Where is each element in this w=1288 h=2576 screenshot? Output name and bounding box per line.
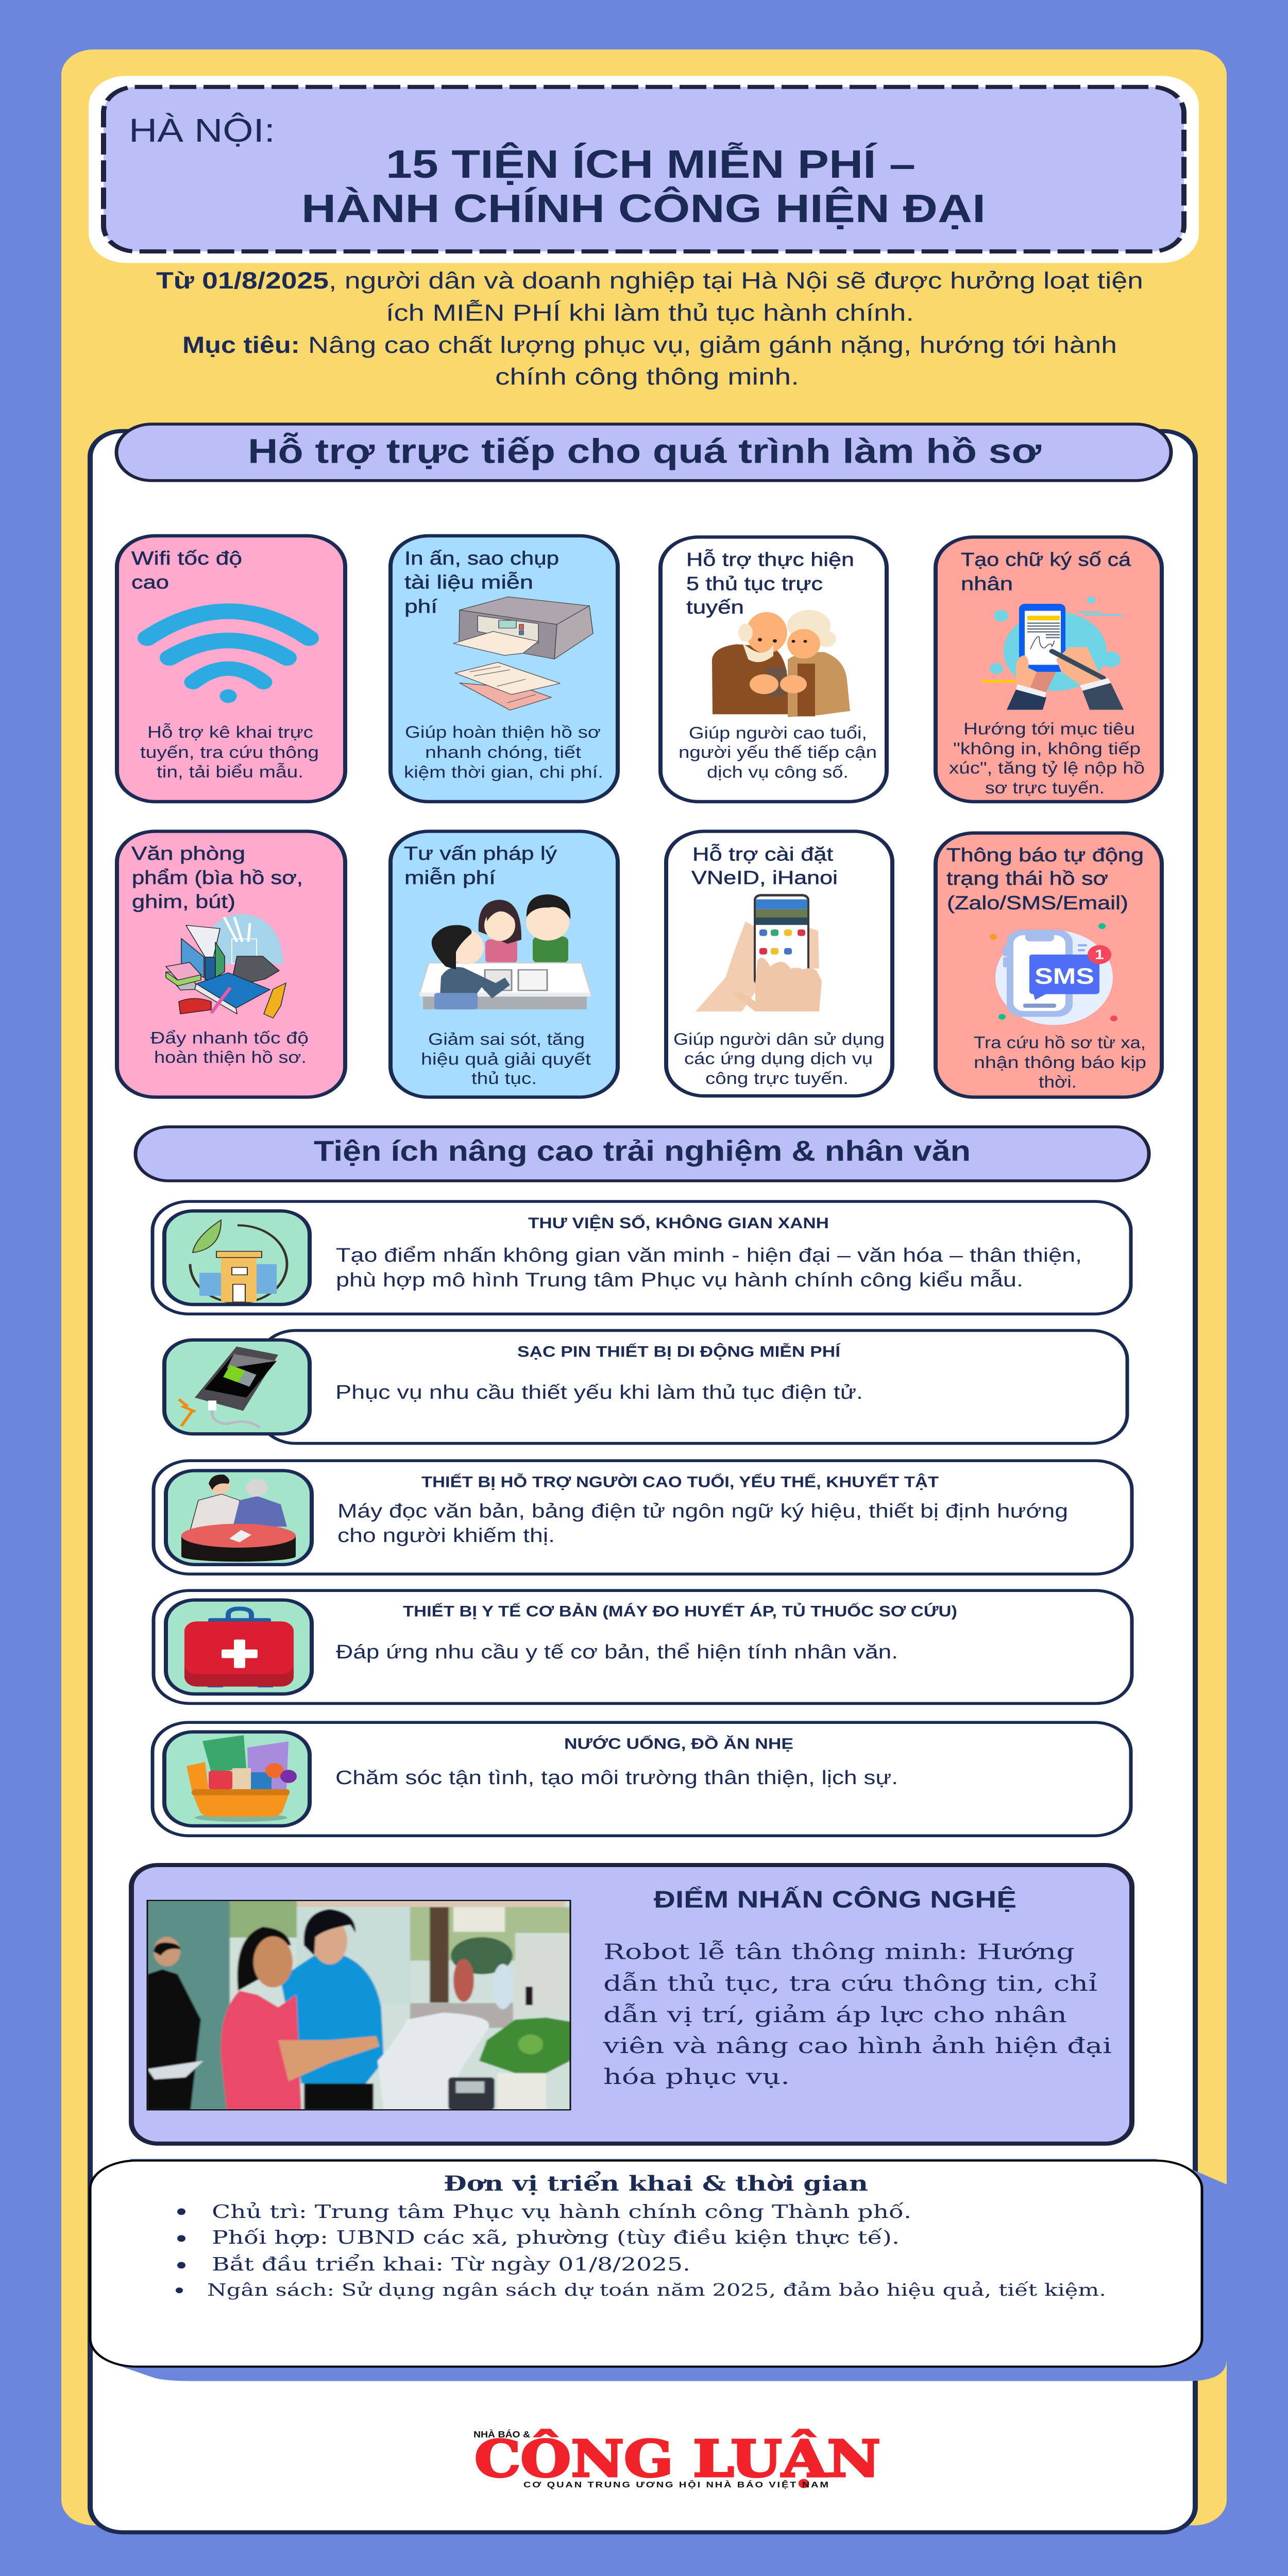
icon: SMS phone: 1	[1095, 948, 1104, 962]
title	[301, 142, 986, 231]
card background	[660, 537, 887, 802]
panel text: dẫn thủ tục, tra cứu thông tin, chỉ	[603, 1971, 1097, 1996]
card title: Văn phòng	[131, 842, 245, 864]
card description: thời.	[1039, 1073, 1077, 1091]
bullet list: Chủ trì: Trung tâm Phục vụ hành chính công Thành phố.	[212, 2201, 911, 2223]
kicker: Hà Nội: HÀ NỘI:	[129, 112, 275, 149]
intro text: Mục tiêu:	[182, 331, 300, 358]
logo: Công Luận: NHÀ BÁO &	[473, 2429, 530, 2440]
row heading: THIẾT BỊ HỖ TRỢ NGƯỜI CAO TUỔI, YẾU THẾ, KHUYẾT TẬT	[421, 1473, 939, 1490]
card title: Hỗ trợ cài đặt	[692, 843, 833, 865]
card title: In ấn, sao chụp	[404, 547, 559, 569]
row text: Chăm sóc tận tình, tạo môi trường thân thiện, lịch sự.	[335, 1767, 898, 1789]
card title: Wifi tốc độ	[131, 547, 242, 569]
card: digital signature	[936, 537, 1162, 802]
card description: nhận thông báo kịp	[974, 1053, 1146, 1072]
panel: implementation info	[90, 2159, 1227, 2381]
card title: Thông báo tự động	[946, 844, 1144, 866]
logo: Công Luận	[473, 2429, 880, 2489]
card description: công trực tuyến.	[705, 1069, 849, 1088]
card background	[936, 833, 1162, 1097]
row box	[152, 1722, 1131, 1836]
row text: Máy đọc văn bản, bảng điện tử ngôn ngữ ký hiệu, thiết bị định hướng	[337, 1500, 1068, 1522]
intro text: , người dân và doanh nghiệp tại Hà Nội sẽ được hưởng loạt tiện	[329, 267, 1143, 294]
card description	[679, 723, 877, 782]
panel blue extruded shadow	[114, 2159, 1227, 2381]
icon tile with charging phone	[164, 1340, 310, 1434]
row text: cho người khiếm thị.	[337, 1524, 555, 1547]
panel: technology highlight	[131, 1865, 1132, 2144]
card: VNeID install	[666, 832, 892, 1096]
icon: phone signature	[981, 597, 1124, 710]
icon: wifi	[147, 611, 309, 703]
card: printing	[391, 536, 618, 802]
card title: 5 thủ tục trực	[686, 573, 823, 595]
card description	[140, 723, 319, 781]
card title: Tạo chữ ký số cá	[961, 549, 1131, 570]
card title: VNeID, iHanoi	[691, 867, 838, 888]
logo: Công Luận: CƠ QUAN TRUNG ƯƠNG HỘI NHÀ BÁO VIỆT NAM	[523, 2480, 828, 2489]
row box	[152, 1201, 1131, 1314]
card title: (Zalo/SMS/Email)	[947, 892, 1128, 913]
row: phone charging	[164, 1330, 1127, 1444]
card description: Đẩy nhanh tốc độ	[150, 1028, 309, 1047]
card title: nhân	[961, 573, 1013, 595]
card background	[117, 832, 345, 1097]
card description: Giúp người dân sử dụng	[673, 1030, 885, 1048]
card description: người yếu thế tiếp cận	[679, 743, 877, 761]
logo: Công Luận: LUẬN	[693, 2429, 880, 2488]
panel text: dẫn vị trí, giảm áp lực cho nhân	[603, 2003, 1067, 2027]
row box	[154, 1461, 1132, 1574]
card description	[949, 719, 1145, 797]
header dashed box	[104, 87, 1184, 251]
panel text: hóa phục vụ.	[603, 2064, 790, 2089]
card description: tuyến, tra cứu thông	[140, 743, 319, 761]
card description: nhanh chóng, tiết	[425, 743, 581, 761]
panel text	[603, 1939, 1112, 2089]
card description	[421, 1030, 591, 1088]
icon tile with first aid kit	[166, 1600, 312, 1694]
card description	[974, 1033, 1146, 1091]
card: online procedures	[660, 537, 887, 802]
card description: Hướng tới mục tiêu	[963, 719, 1135, 738]
card: stationery	[117, 832, 345, 1097]
icon: SMS phone	[990, 923, 1117, 1025]
card background	[391, 536, 618, 802]
row heading: THIẾT BỊ Y TẾ CƠ BẢN (MÁY ĐO HUYẾT ÁP, TỦ THUỐC SƠ CỨU)	[403, 1602, 957, 1620]
icon: consultation	[419, 894, 591, 1009]
row text: phù hợp mô hình Trung tâm Phục vụ hành chính công kiểu mẫu.	[336, 1268, 1023, 1291]
card title: Tư vấn pháp lý	[404, 842, 557, 864]
card description: "không in, không tiếp	[953, 739, 1141, 758]
card background	[391, 832, 618, 1097]
card background	[117, 536, 345, 802]
card: legal advice	[391, 832, 618, 1097]
section heading: humane amenities	[135, 1127, 1149, 1181]
panel text: viên và nâng cao hình ảnh hiện đại	[603, 2033, 1112, 2058]
icon: printer and papers	[453, 597, 593, 710]
card description: Tra cứu hồ sơ từ xa,	[974, 1033, 1146, 1052]
intro text: Nâng cao chất lượng phục vụ, giảm gánh nặng, hướng tới hành	[308, 331, 1117, 358]
card description: Hỗ trợ kê khai trực	[147, 723, 313, 741]
intro text: ích MIỄN PHÍ khi làm thủ tục hành chính.	[386, 299, 914, 326]
logo: Công Luận: CÔNG	[474, 2429, 673, 2488]
card description	[673, 1030, 885, 1088]
row: drinks and snacks	[152, 1722, 1131, 1836]
row text: Tạo điểm nhấn không gian văn minh - hiện đại – văn hóa – thân thiện,	[336, 1244, 1082, 1266]
row text: Đáp ứng nhu cầu y tế cơ bản, thể hiện tính nhân văn.	[336, 1641, 898, 1663]
title: HÀNH CHÍNH CÔNG HIỆN ĐẠI	[301, 187, 986, 231]
row box	[260, 1330, 1127, 1444]
section heading: humane amenities: Tiện ích nâng cao trải nghiệm & nhân văn	[314, 1135, 971, 1167]
card description	[150, 1028, 309, 1066]
card title	[691, 843, 838, 888]
panel text: Robot lễ tân thông minh: Hướng	[603, 1939, 1075, 1964]
card title: tuyến	[686, 597, 744, 618]
card description	[404, 723, 603, 782]
card title: phí	[404, 596, 437, 617]
card description: tin, tải biểu mẫu.	[157, 762, 303, 781]
row text	[337, 1500, 1068, 1547]
card description: kiệm thời gian, chi phí.	[404, 762, 603, 782]
row heading: NƯỚC UỐNG, ĐỒ ĂN NHẸ	[564, 1735, 793, 1752]
card title: trạng thái hồ sơ	[946, 868, 1108, 889]
row text	[336, 1244, 1082, 1291]
bullet list: Bắt đầu triển khai: Từ ngày 01/8/2025.	[212, 2254, 690, 2275]
card description: Giúp hoàn thiện hồ sơ	[405, 723, 601, 741]
panel heading: Đơn vị triển khai & thời gian	[444, 2171, 868, 2196]
header white frame	[89, 76, 1199, 263]
card: SMS notification	[936, 833, 1162, 1097]
row heading: THƯ VIỆN SỐ, KHÔNG GIAN XANH	[528, 1214, 829, 1232]
card description: hiệu quả giải quyết	[421, 1049, 591, 1068]
icon: SMS phone: SMS	[1035, 964, 1094, 989]
icon: office supplies	[166, 914, 286, 1018]
intro text	[156, 267, 1143, 389]
bullet list	[176, 2201, 1106, 2300]
card description: xúc", tăng tỷ lệ nộp hồ	[949, 758, 1145, 777]
row heading: SẠC PIN THIẾT BỊ DI ĐỘNG MIỄN PHÍ	[517, 1343, 841, 1361]
panel background	[90, 2161, 1202, 2367]
main white panel	[90, 431, 1195, 2532]
section heading: direct support: Hỗ trợ trực tiếp cho quá trình làm hồ sơ	[248, 432, 1042, 470]
card description: hoàn thiện hồ sơ.	[154, 1048, 307, 1066]
card background	[936, 537, 1162, 802]
card description: thủ tục.	[471, 1069, 537, 1088]
card title	[946, 844, 1144, 913]
row box	[154, 1590, 1132, 1703]
card description: sơ trực tuyến.	[985, 778, 1105, 797]
photo: robot receptionist	[147, 1901, 570, 2110]
card description: Giảm sai sót, tăng	[428, 1030, 585, 1048]
title: 15 TIỆN ÍCH MIỄN PHÍ –	[386, 142, 916, 187]
card title: cao	[131, 571, 169, 592]
intro text: Từ 01/8/2025	[156, 267, 329, 294]
panel heading: ĐIỂM NHẤN CÔNG NGHỆ	[654, 1886, 1016, 1913]
card description: Giúp người cao tuổi,	[689, 723, 867, 742]
icon tile with people at table	[166, 1470, 312, 1565]
intro text: chính công thông minh.	[495, 363, 799, 389]
card title	[131, 842, 303, 912]
row text: Phục vụ nhu cầu thiết yếu khi làm thủ tục điện tử.	[335, 1382, 863, 1403]
card title: tài liệu miễn	[404, 571, 533, 592]
row: assistive devices	[154, 1461, 1132, 1574]
row: digital library	[152, 1201, 1131, 1314]
card title: ghim, bút)	[132, 891, 235, 912]
bullet list: Ngân sách: Sử dụng ngân sách dự toán năm 2025, đảm bảo hiệu quả, tiết kiệm.	[207, 2280, 1106, 2300]
panel background	[131, 1865, 1132, 2144]
card: wifi	[117, 536, 345, 802]
card title: miễn phí	[404, 867, 496, 888]
header block	[89, 76, 1199, 263]
icon tile with green building	[164, 1211, 310, 1304]
section heading: direct support	[116, 424, 1171, 481]
row: medical devices	[154, 1590, 1132, 1703]
card title	[961, 549, 1131, 595]
card title: Hỗ trợ thực hiện	[686, 549, 854, 570]
card background	[666, 832, 892, 1096]
card title	[131, 547, 242, 592]
card title	[404, 547, 559, 617]
card title	[404, 842, 557, 888]
card title: phẩm (bìa hồ sơ,	[132, 867, 303, 888]
card description: các ứng dụng dịch vụ	[684, 1049, 873, 1068]
card title	[686, 549, 854, 618]
icon tile with snack basket	[164, 1732, 310, 1826]
icon: elderly couple	[712, 610, 850, 717]
icon: hand holding phone	[696, 894, 822, 1011]
bullet list: Phối hợp: UBND các xã, phường (tùy điều kiện thực tế).	[212, 2227, 900, 2248]
card description: dịch vụ công số.	[707, 762, 849, 782]
